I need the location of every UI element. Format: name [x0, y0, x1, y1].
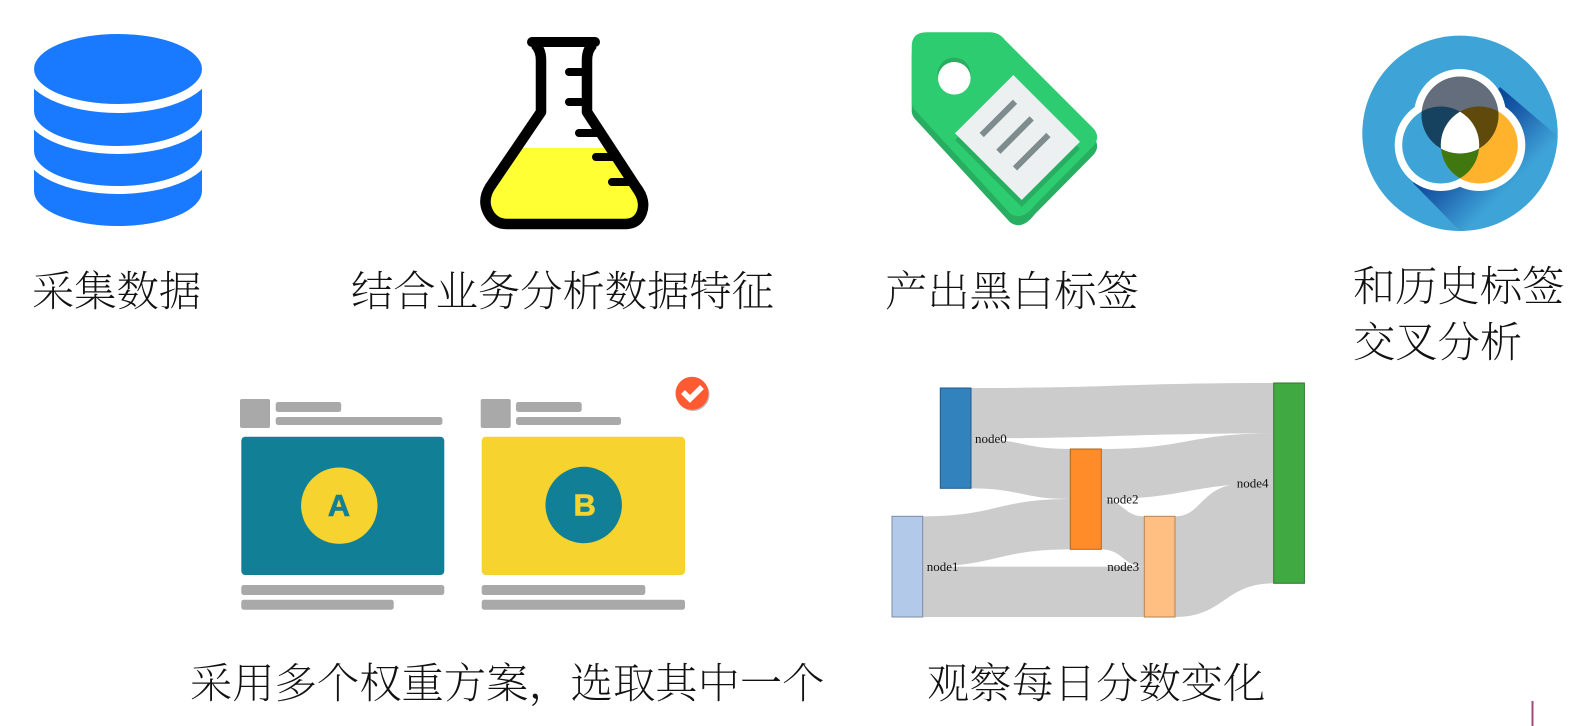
variant B: B [574, 488, 596, 523]
icon: database [24, 25, 212, 226]
label: weight schemes: 采用多个权重方案，选取其中一个 [190, 661, 824, 708]
sankey chart [892, 383, 1304, 617]
sankey nodes [892, 383, 1304, 617]
sankey labels: node0 [975, 431, 1007, 446]
label: cross analysis with historic tags: 和历史标签 [1353, 264, 1564, 311]
panel: A/B test [240, 377, 710, 610]
sankey labels: node3 [1107, 559, 1139, 574]
label: cross analysis with historic tags [1353, 264, 1564, 367]
label: observe daily score: 观察每日分数变化 [927, 661, 1265, 708]
icon: venn diagram [1362, 36, 1562, 233]
sankey labels: node4 [1237, 476, 1269, 491]
label: analyse data features: 结合业务分析数据特征 [351, 269, 774, 316]
label: output black and white tags: 产出黑白标签 [885, 269, 1139, 316]
sankey links [923, 383, 1274, 617]
icon: check badge [676, 377, 710, 411]
label: cross analysis with historic tags: 交叉分析 [1353, 320, 1522, 367]
sankey labels: node1 [927, 559, 958, 574]
sankey labels [927, 431, 1269, 574]
variant A: A [328, 488, 350, 523]
artifact: corner line [1532, 701, 1534, 726]
variant A [240, 399, 444, 610]
icon: tag [912, 32, 1097, 225]
sankey labels: node2 [1107, 491, 1138, 506]
variant B [481, 399, 685, 610]
label: collect data: 采集数据 [32, 269, 201, 316]
icon: flask [470, 42, 660, 228]
